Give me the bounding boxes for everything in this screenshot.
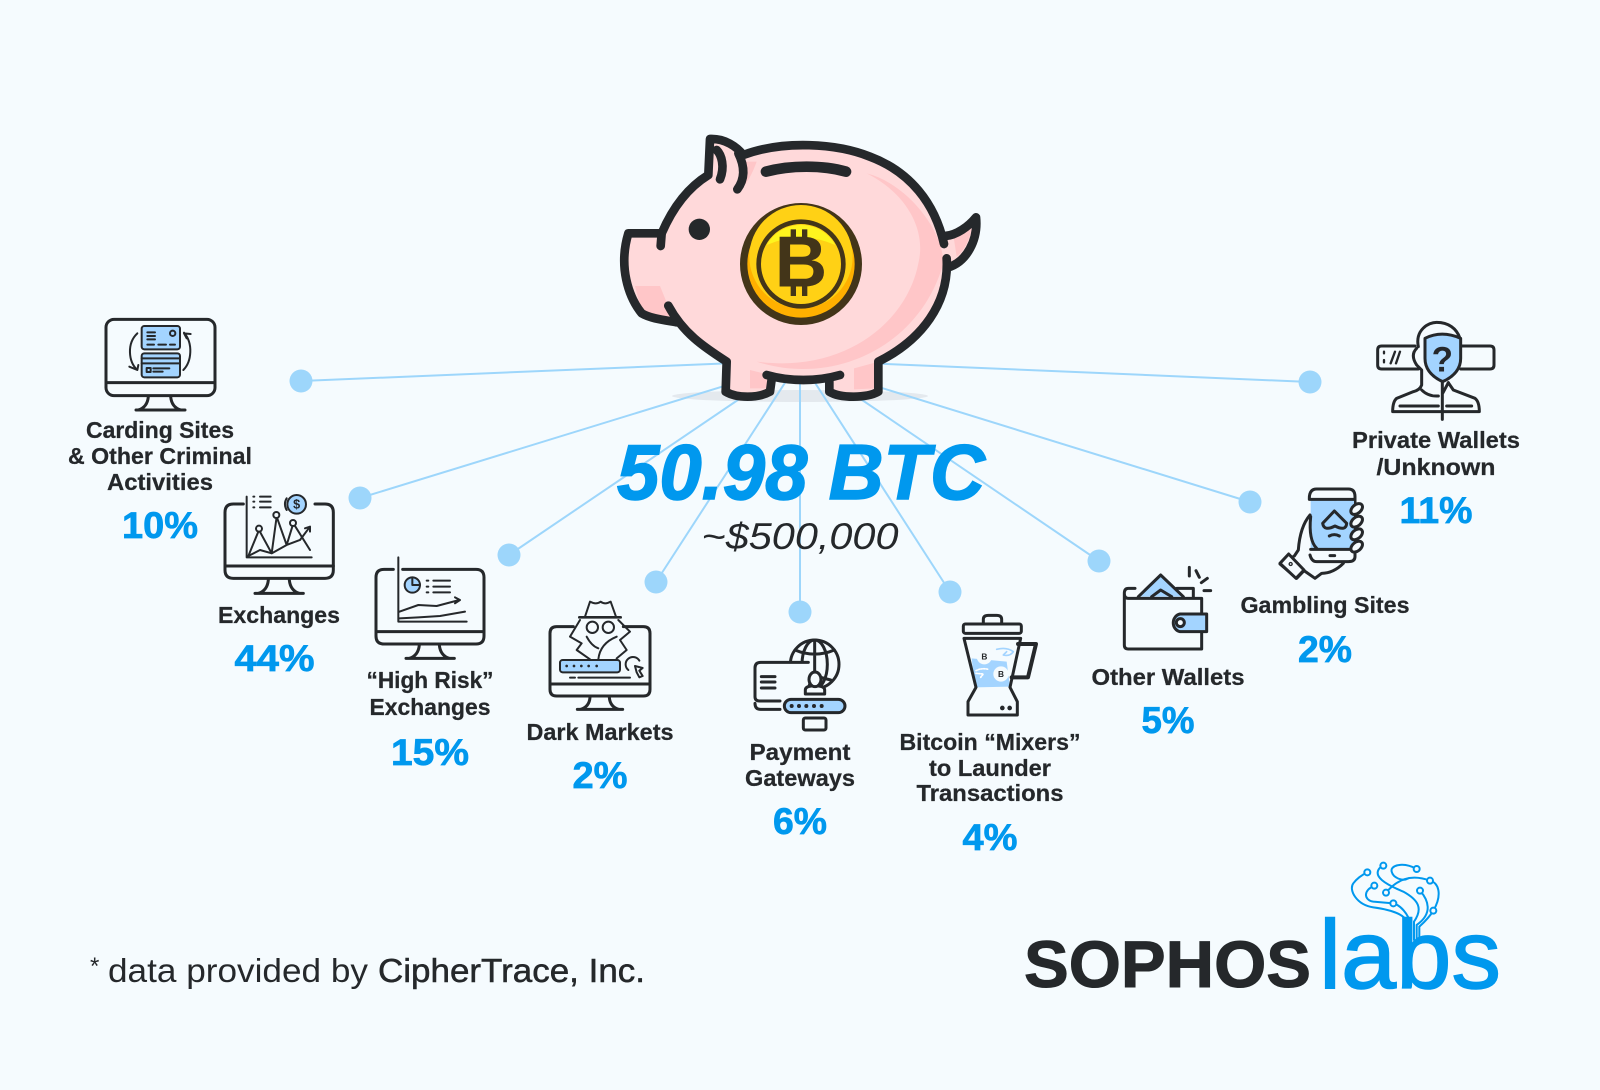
percent: 6%: 6% <box>773 801 827 842</box>
icon: monitor with credit cards <box>106 319 215 410</box>
icon: monitor with detective <box>550 602 650 709</box>
panel: other wallets <box>1092 567 1244 741</box>
panel: exchanges <box>218 495 340 679</box>
percent: 5%: 5% <box>1142 700 1194 741</box>
footnote: CipherTrace, Inc. <box>378 952 645 989</box>
footnote <box>90 952 645 989</box>
connector lines and dots <box>290 362 1322 624</box>
icon: blender with bitcoins: B <box>998 669 1004 679</box>
percent: 44%: 44% <box>234 638 314 679</box>
panel: gambling sites <box>1240 489 1410 670</box>
icon: wallet <box>1124 567 1211 649</box>
icon: bitcoin coin <box>744 205 858 321</box>
footnote: data provided by <box>108 952 369 989</box>
icon: hand holding phone with spade <box>1280 489 1365 578</box>
icon: monitor with chart: $ <box>293 498 300 512</box>
label: bitcoin mixers: Bitcoin “Mixers” <box>900 729 1080 755</box>
icon: monitor with trend <box>376 557 484 658</box>
label: bitcoin mixers: Transactions <box>916 780 1064 806</box>
icon: blender with bitcoins: B <box>981 652 987 662</box>
subtitle: dollar value: ~$500,000 <box>702 516 899 557</box>
panel: high risk exchanges <box>366 557 494 773</box>
logo: sophoslabs <box>1024 863 1501 1009</box>
icon: bitcoin coin: B <box>775 222 827 303</box>
footnote: * <box>90 953 99 980</box>
label: carding sites: Activities <box>107 469 213 495</box>
panel: bitcoin mixers <box>900 615 1080 858</box>
icon: hooded figure with question shield: ? <box>1432 341 1453 380</box>
panel: dark markets <box>526 602 674 796</box>
label: bitcoin mixers: to Launder <box>929 755 1051 781</box>
label: dark markets: Dark Markets <box>526 719 674 745</box>
label: carding sites: Carding Sites <box>86 417 234 443</box>
panel: payment gateways <box>745 640 855 842</box>
label: carding sites: & Other Criminal <box>68 443 252 469</box>
logo wordmark: labs: labs <box>1319 900 1501 1009</box>
percent: 4%: 4% <box>962 817 1018 858</box>
label: private wallets: Private Wallets <box>1352 427 1520 453</box>
percent: 15%: 15% <box>391 732 469 773</box>
label: high risk exchanges: “High Risk” <box>366 667 494 693</box>
label: high risk exchanges: Exchanges <box>370 694 490 720</box>
percent: 11%: 11% <box>1400 490 1472 531</box>
pig shadow <box>672 390 928 402</box>
label: exchanges: Exchanges <box>218 602 340 628</box>
icon: hooded figure with question shield <box>1378 322 1494 419</box>
label: other wallets: Other Wallets <box>1092 664 1244 690</box>
icon: piggy bank with bitcoin <box>624 138 976 397</box>
title: 50.98 BTC: 50.98 BTC <box>617 428 987 516</box>
percent: 2% dark markets: 2% <box>572 755 628 796</box>
icon: blender with bitcoins <box>963 615 1036 715</box>
label: private wallets: /Unknown <box>1376 454 1496 480</box>
icon: circuit brain <box>1352 863 1439 940</box>
logo wordmark: sophos: SOPHOS <box>1024 927 1311 1001</box>
label: payment gateways: Payment <box>750 739 851 765</box>
icon: monitor with chart <box>225 495 333 593</box>
label: gambling sites: Gambling Sites <box>1240 592 1410 618</box>
percent: 2% gambling: 2% <box>1298 629 1352 670</box>
panel: carding sites <box>68 319 252 546</box>
panel: private wallets <box>1352 322 1520 531</box>
percent: 10%: 10% <box>122 505 198 546</box>
icon: globe and card with password <box>755 640 845 730</box>
label: payment gateways: Gateways <box>745 765 855 791</box>
